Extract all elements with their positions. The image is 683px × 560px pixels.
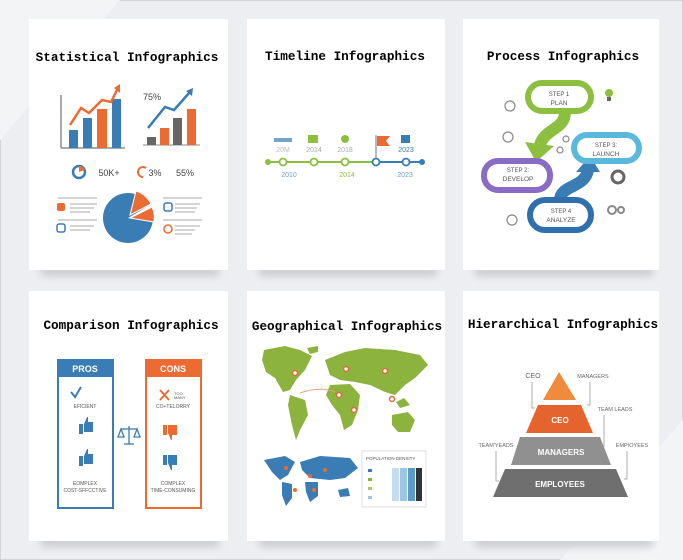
title: geographical: Geographical Infographics bbox=[252, 319, 442, 334]
pyramid labels: CEO bbox=[525, 373, 541, 380]
icon: bulb bbox=[605, 89, 613, 101]
pie chart bbox=[103, 191, 154, 243]
bar chart 2 bbox=[143, 88, 200, 145]
timeline axis: 2014 bbox=[339, 172, 355, 179]
timeline axis: 20M bbox=[276, 147, 290, 154]
process icons bbox=[503, 101, 624, 225]
title: comparison: Comparison Infographics bbox=[43, 318, 219, 333]
title: process: Process Infographics bbox=[487, 49, 639, 64]
timeline axis: 2018 bbox=[337, 147, 353, 154]
panel: process bbox=[463, 19, 659, 270]
step 2 bbox=[484, 161, 550, 190]
population density legend bbox=[362, 451, 426, 507]
panel: statistical bbox=[29, 19, 228, 270]
title: statistical: Statistical Infographics bbox=[36, 50, 218, 65]
step 4: STEP 4 bbox=[551, 209, 572, 215]
bar chart 2: 75% bbox=[143, 92, 161, 102]
pyramid: EMPLOYEES bbox=[535, 480, 586, 489]
blue arrow bbox=[560, 170, 588, 200]
cons column: CO+TELORRY bbox=[156, 404, 191, 410]
green arrow bbox=[540, 112, 565, 145]
map pins bbox=[292, 366, 394, 412]
cons column: TOO bbox=[174, 391, 183, 396]
step 1: PLAN bbox=[551, 100, 568, 107]
pros column: PROS bbox=[72, 364, 98, 374]
cons column bbox=[145, 359, 202, 508]
pyramid: CEO bbox=[551, 416, 569, 425]
cons column: CONS bbox=[160, 364, 186, 374]
icon: scale bbox=[118, 426, 140, 444]
pyramid bbox=[493, 372, 628, 497]
stats row: 55% bbox=[176, 168, 194, 178]
pyramid labels: EMPIOYEES bbox=[616, 443, 649, 449]
step 2: DEVELOP bbox=[503, 176, 533, 183]
cons column: COMPLEX bbox=[161, 481, 186, 487]
timeline axis: 2023 bbox=[397, 172, 413, 179]
panel: timeline bbox=[247, 19, 445, 270]
step 1 bbox=[528, 83, 591, 111]
pyramid labels: TEAM LEADS bbox=[598, 407, 633, 413]
pros column: EOMPLEX bbox=[73, 481, 98, 487]
pros column: COST-SFFCCTIVE bbox=[63, 488, 107, 494]
panel: hierarchical bbox=[463, 291, 659, 541]
bar chart 1 bbox=[61, 84, 125, 148]
panel: comparison bbox=[29, 291, 228, 541]
stats row: 50K+ bbox=[98, 168, 120, 178]
pyramid labels bbox=[479, 373, 649, 449]
stats row: 3% bbox=[148, 168, 162, 178]
stats row bbox=[73, 166, 194, 178]
pyramid labels: MANAGERS bbox=[577, 374, 609, 380]
panel: geographical bbox=[247, 291, 445, 541]
title: timeline: Timeline Infographics bbox=[265, 49, 425, 64]
timeline axis: 2023 bbox=[398, 147, 414, 154]
pros column: EFICIENT bbox=[74, 404, 96, 410]
step 3: LAUNCH bbox=[593, 151, 620, 158]
step 3 bbox=[574, 135, 639, 161]
pyramid labels: TEAM'YEADS bbox=[479, 443, 514, 449]
timeline axis bbox=[265, 135, 425, 179]
title: hierarchical: Hierarchical Infographics bbox=[468, 317, 658, 332]
legend icons bbox=[57, 198, 202, 234]
timeline axis: 2010 bbox=[281, 172, 297, 179]
cons column: MANY bbox=[174, 395, 186, 400]
timeline axis: 2014 bbox=[306, 147, 322, 154]
pros column bbox=[57, 359, 114, 508]
step 2: STEP 2: bbox=[507, 168, 529, 174]
step 4 bbox=[530, 200, 591, 230]
step 1: STEP 1 bbox=[549, 92, 570, 98]
green world map bbox=[262, 346, 428, 440]
pyramid: MANAGERS bbox=[538, 448, 585, 457]
population density legend: POPULATION DENSITY bbox=[366, 456, 415, 461]
step 4: ANALYZE bbox=[546, 217, 576, 224]
cons column: TIME-CONSUMING bbox=[151, 488, 195, 494]
blue world map bbox=[264, 456, 358, 506]
step 3: STEP 3: bbox=[595, 143, 617, 149]
